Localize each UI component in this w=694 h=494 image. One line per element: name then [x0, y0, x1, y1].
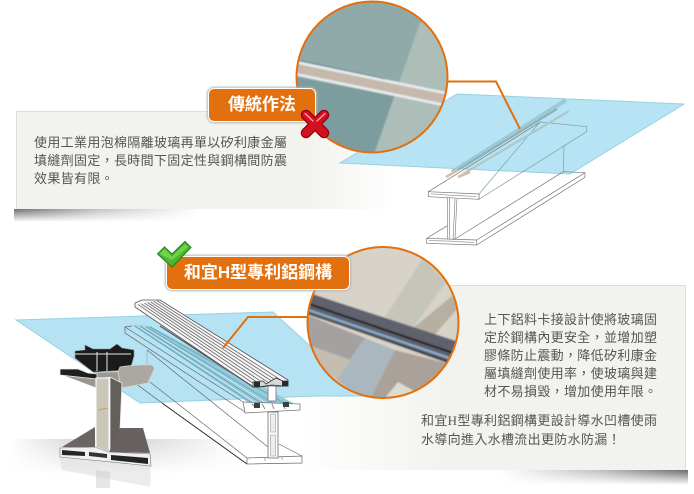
patented beam flange end — [243, 402, 300, 413]
icon: green check mark — [156, 240, 192, 268]
aluminium H-beam sample — [60, 344, 154, 488]
text block: patented rail benefits: 上下鋁料卡接設計使將玻璃固 — [484, 312, 657, 327]
text block: waterproof groove — [421, 413, 657, 447]
text block: traditional method description: 使用工業用泡棉隔離玻璃再單以矽利康金屬 — [34, 135, 287, 150]
text block: patented rail benefits: 材不易損毀，增加使用年限。 — [484, 384, 657, 399]
heading badge: patented aluminium structure: 和宜H型專利鋁鋼構 — [184, 263, 332, 282]
text block: patented rail benefits: 屬填縫劑使用率，使玻璃與建 — [484, 366, 657, 381]
patented lower H-beam outline — [125, 326, 302, 464]
heading badge: traditional method: 傳統作法 — [228, 95, 296, 114]
floor shadow under aluminium beam — [22, 439, 220, 466]
patented glass pane — [16, 312, 365, 403]
panel: traditional method background — [16, 111, 396, 209]
text block: traditional method description: 填縫劑固定，長時間下固定性與鋼構間防震 — [34, 153, 287, 168]
panel shadow: patented method — [513, 470, 688, 484]
heading badge: patented aluminium structure — [166, 256, 350, 290]
patented upper aluminium rail — [135, 300, 288, 401]
text block: patented rail benefits: 定於鋼構內更安全，並增加塑 — [484, 330, 657, 345]
heading badge: traditional method — [208, 88, 316, 122]
traditional glass pane — [340, 94, 684, 174]
panel: patented method background — [300, 285, 686, 470]
icon: red cross — [300, 110, 330, 138]
traditional H-beam outline — [427, 122, 587, 245]
text block: waterproof groove: 和宜H型專利鋁鋼構更設計導水凹槽使雨 — [421, 413, 657, 428]
text block: patented rail benefits: 膠條防止震動，降低矽利康金 — [484, 348, 657, 363]
magnifier: patented rail photo — [306, 246, 460, 399]
magnifier: traditional seam photo — [296, 0, 448, 154]
text block: patented rail benefits — [484, 312, 657, 399]
traditional seam strips — [446, 100, 569, 177]
text block: traditional method description: 效果皆有限。 — [34, 171, 114, 186]
text block: traditional method description — [34, 135, 287, 186]
panel shadow: traditional method — [14, 209, 184, 221]
leader line: traditional — [448, 82, 520, 129]
leader line: patented — [223, 317, 310, 348]
text block: waterproof groove: 水導向進入水槽流出更防水防漏！ — [421, 432, 621, 447]
patented lower rail through the glass — [132, 325, 295, 409]
